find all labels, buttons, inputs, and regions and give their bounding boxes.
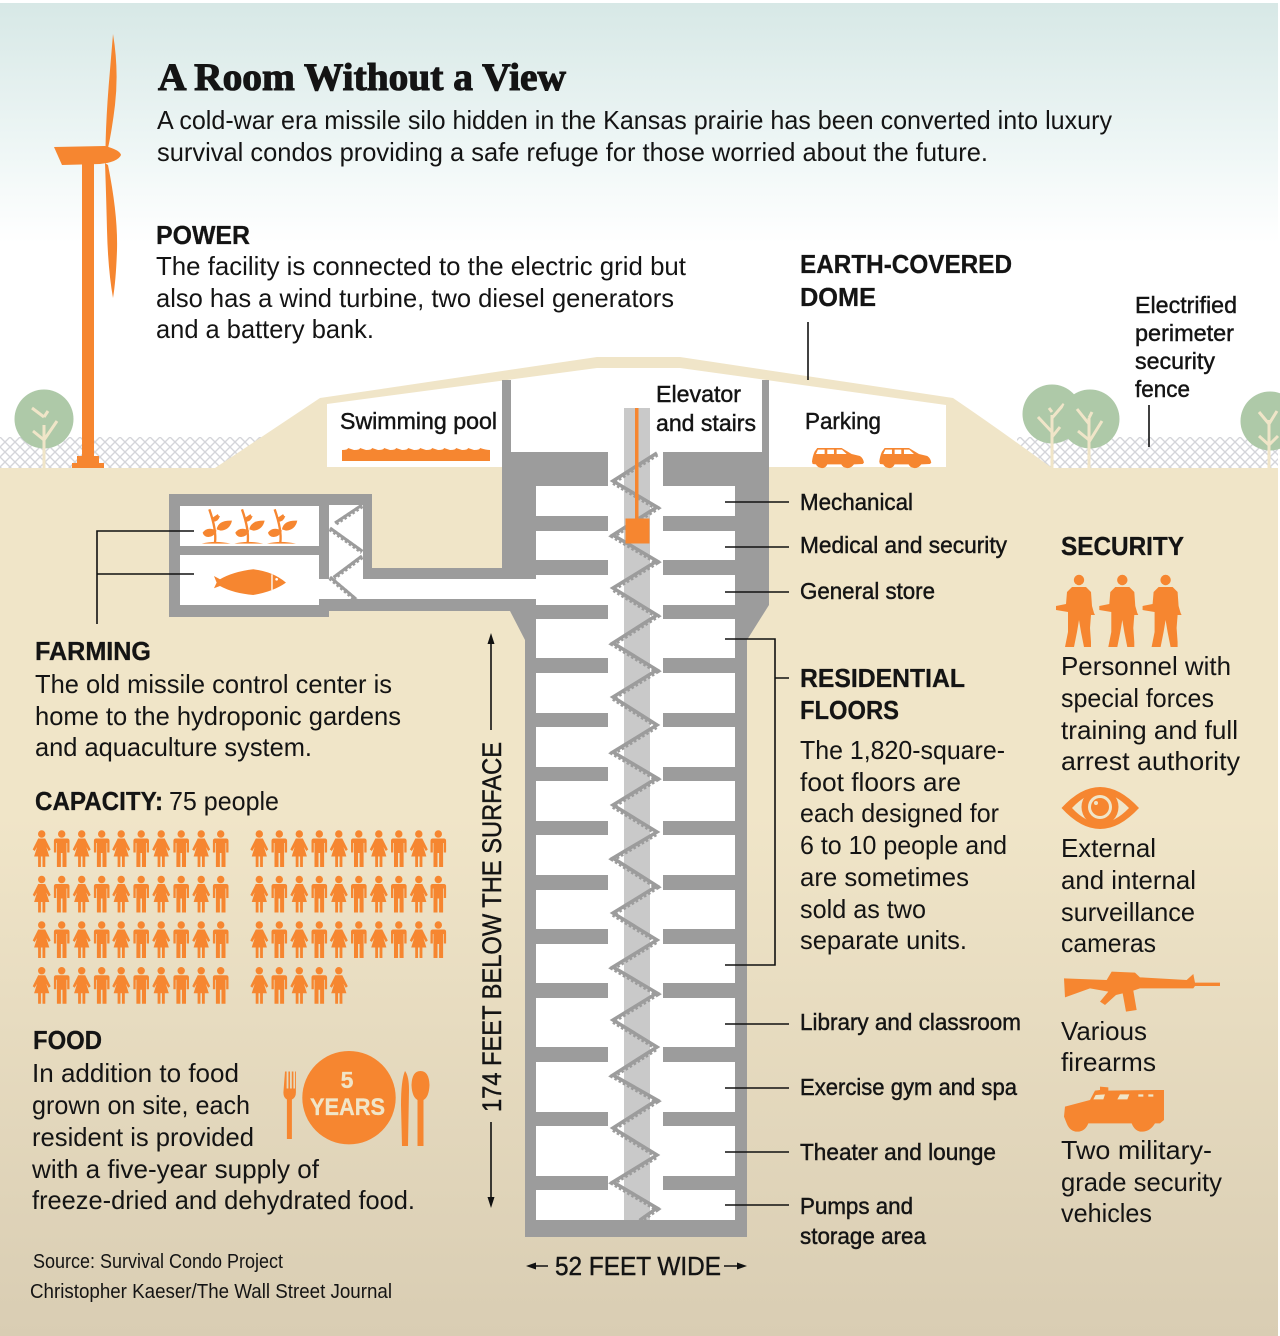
perimeter fence right (1017, 437, 1278, 469)
corridor and stair room (319, 505, 536, 599)
capacity label: 75 people (169, 786, 279, 816)
subtitle: A cold-war era missile silo hidden in the Kansas prairie has been converted into luxury (157, 105, 1112, 135)
elevator car and cable (626, 408, 650, 544)
tree right 2 (1060, 390, 1120, 468)
residential floors text (800, 663, 1007, 955)
icon: rifle (1064, 972, 1220, 1012)
farming text (35, 636, 401, 762)
title: A Room Without a View (158, 56, 566, 99)
vehicles text: Two military- (1061, 1135, 1212, 1165)
power text (156, 220, 687, 344)
floor labels: Mechanical (800, 489, 913, 515)
icon: pool water (342, 448, 490, 461)
residential floors text: sold as two (800, 894, 926, 924)
power text: also has a wind turbine, two diesel generators (156, 283, 674, 313)
elevator label: Elevator (656, 381, 741, 407)
swimming pool label: Swimming pool (340, 408, 497, 434)
icon: plate with five years: YEARS (310, 1094, 385, 1121)
cameras text (1061, 833, 1196, 958)
tree left (14, 390, 74, 468)
dome shaft walls (502, 380, 769, 1237)
fence label: perimeter (1135, 320, 1234, 346)
residential floors text: FLOORS (800, 695, 899, 725)
floor slabs (536, 516, 735, 1190)
source credit: Christopher Kaeser/The Wall Street Journal (30, 1281, 392, 1303)
earth-covered dome label (800, 249, 1012, 380)
floor labels: Theater and lounge (800, 1139, 996, 1165)
farming text: and aquaculture system. (35, 732, 312, 762)
elevator label: and stairs (656, 410, 756, 436)
farming room top (180, 506, 319, 546)
leader lines (97, 502, 789, 1205)
personnel text: Personnel with (1061, 651, 1231, 681)
personnel text: training and full (1061, 715, 1238, 745)
residential floors text: RESIDENTIAL (800, 663, 965, 693)
floor labels: General store (800, 578, 935, 604)
icon: plants (202, 509, 297, 544)
residential floors text: The 1,820-square- (800, 735, 1005, 765)
cameras text: surveillance (1061, 897, 1195, 927)
fence label (1135, 292, 1237, 447)
icon: eye (1062, 787, 1139, 829)
icon: cars (812, 448, 931, 468)
vehicles text: grade security (1061, 1167, 1222, 1197)
capacity label: CAPACITY: (35, 786, 163, 816)
icon: fish (214, 569, 286, 595)
fence label: security (1135, 348, 1215, 374)
vehicles text (1061, 1135, 1222, 1228)
farming text: FARMING (35, 636, 151, 666)
residential floors text: each designed for (800, 798, 999, 828)
icon: armored vehicle (1064, 1087, 1164, 1132)
width dimension: 52 feet: 52 FEET WIDE (555, 1251, 721, 1281)
elevator label (656, 381, 756, 436)
fence label: Electrified (1135, 292, 1237, 318)
firearms text (1061, 1016, 1156, 1077)
floor labels (800, 489, 1021, 1249)
silo structure (169, 380, 769, 1237)
security heading: SECURITY (1061, 531, 1184, 561)
tree right 1 (1022, 384, 1082, 468)
dome interior (327, 368, 946, 467)
floor labels: Exercise gym and spa (800, 1074, 1018, 1100)
food text (31, 1025, 415, 1215)
wind turbine (54, 34, 121, 468)
farming text: home to the hydroponic gardens (35, 701, 401, 731)
floor labels: Medical and security (800, 532, 1007, 558)
main staircase (613, 453, 657, 1221)
cameras text: External (1061, 833, 1156, 863)
firearms text: firearms (1061, 1047, 1156, 1077)
icon: plate with five years (283, 1051, 430, 1146)
power text: POWER (156, 220, 250, 250)
residential floors text: 6 to 10 people and (800, 830, 1007, 860)
elevator shaft (624, 408, 650, 1220)
subtitle: survival condos providing a safe refuge for those worried about the future. (157, 137, 988, 167)
fence label: fence (1135, 376, 1190, 402)
parking label: Parking (805, 408, 881, 434)
cameras text: cameras (1061, 928, 1156, 958)
sky background (0, 3, 1278, 243)
firearms text: Various (1061, 1016, 1147, 1046)
food text: freeze-dried and dehydrated food. (32, 1185, 415, 1215)
shaft opening (608, 452, 663, 488)
personnel text (1061, 651, 1240, 776)
tree right 3 (1240, 392, 1280, 468)
floors white interior (536, 486, 735, 1220)
icon: soldiers (1056, 575, 1182, 647)
vehicles text: vehicles (1061, 1198, 1152, 1228)
ground gradient (0, 469, 1278, 1336)
control center block (169, 494, 502, 617)
capacity label (35, 786, 279, 816)
icon: plate with five years: 5 (341, 1067, 354, 1093)
food text: with a five-year supply of (31, 1154, 320, 1184)
subtitle (157, 105, 1112, 167)
residential floors text: separate units. (800, 925, 967, 955)
earth-covered dome label: DOME (800, 282, 876, 312)
farming text: The old missile control center is (35, 669, 392, 699)
power text: and a battery bank. (156, 314, 374, 344)
ground and earth-covered dome (0, 357, 1278, 1336)
depth dimension: 174 feet: 174 FEET BELOW THE SURFACE (477, 742, 507, 1112)
food text: FOOD (33, 1025, 102, 1055)
personnel text: arrest authority (1061, 746, 1240, 776)
food text: In addition to food (32, 1058, 239, 1088)
earth-covered dome label: EARTH-COVERED (800, 249, 1012, 279)
food text: resident is provided (32, 1122, 254, 1152)
personnel text: special forces (1061, 683, 1214, 713)
residential floors text: are sometimes (800, 862, 969, 892)
source credit: Source: Survival Condo Project (33, 1251, 283, 1273)
cameras text: and internal (1061, 865, 1196, 895)
perimeter fence left (0, 437, 262, 469)
floor labels: storage area (800, 1223, 927, 1249)
control center stairs (330, 505, 362, 600)
floor labels: Library and classroom (800, 1009, 1021, 1035)
power text: The facility is connected to the electric grid but (156, 251, 687, 281)
residential floors text: foot floors are (800, 767, 961, 797)
farming room bottom (180, 555, 319, 605)
food text: grown on site, each (32, 1090, 250, 1120)
floor labels: Pumps and (800, 1193, 913, 1219)
icon: 75 people (33, 830, 446, 1004)
source credit (30, 1251, 392, 1303)
